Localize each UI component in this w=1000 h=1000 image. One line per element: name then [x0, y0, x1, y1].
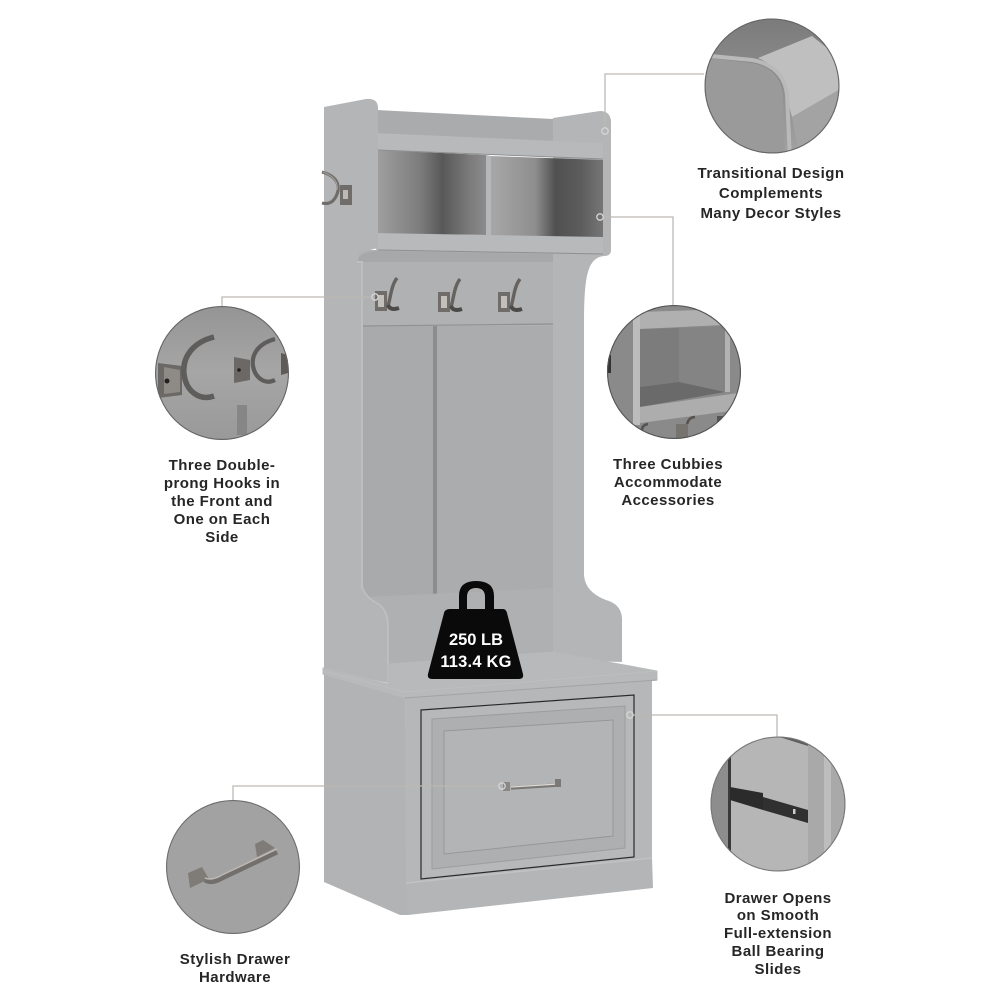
right cubby	[490, 156, 603, 238]
plinth	[406, 858, 653, 915]
detail circle: rounded corner	[704, 18, 840, 154]
drawer front	[421, 695, 634, 879]
caption: One on Each	[174, 511, 270, 528]
callout lines	[222, 74, 777, 800]
panel: transitional design detail	[698, 15, 845, 222]
detail circle: cubby	[605, 303, 743, 443]
caption: Slides	[755, 961, 801, 978]
top back board	[376, 110, 553, 146]
panel: hooks detail	[155, 306, 289, 542]
hall tree furniture illustration	[322, 99, 657, 915]
detail circle: hooks	[155, 306, 289, 440]
left cubby	[376, 150, 487, 235]
left upright panel	[324, 99, 388, 683]
back boards	[362, 326, 433, 600]
back panel upper rail	[355, 250, 553, 326]
caption: Full-extension	[724, 925, 832, 942]
front hook two	[438, 279, 462, 312]
panel: drawer hardware detail	[166, 800, 300, 982]
caption	[724, 890, 832, 978]
caption: Complements	[719, 185, 823, 202]
weight capacity badge	[428, 581, 523, 679]
front hook three	[498, 279, 522, 312]
weight label kilograms: 113.4 KG	[440, 653, 512, 671]
panel: cubbies detail	[605, 303, 743, 509]
detail circle: drawer pull	[166, 800, 300, 934]
caption: Three Cubbies	[613, 456, 723, 473]
caption	[613, 456, 723, 509]
bench seat	[323, 652, 657, 698]
caption: Hardware	[199, 969, 271, 986]
caption	[180, 951, 290, 986]
caption	[698, 165, 844, 222]
weight label pounds: 250 LB	[449, 631, 503, 649]
caption: Stylish Drawer	[180, 951, 290, 968]
caption: Many Decor Styles	[700, 205, 842, 222]
right upright panel	[553, 111, 622, 662]
caption: Side	[205, 529, 239, 546]
caption: Accessories	[621, 492, 715, 509]
panel: drawer slides detail	[708, 734, 848, 978]
drawer handle	[503, 779, 561, 791]
caption: prong Hooks in	[164, 475, 280, 492]
lower cabinet side	[324, 672, 408, 915]
bench back	[365, 588, 553, 672]
caption: the Front and	[171, 493, 273, 510]
caption: Accommodate	[614, 474, 722, 491]
caption: Three Double-	[169, 457, 275, 474]
lower cabinet front	[405, 680, 652, 885]
front hook one	[375, 278, 399, 311]
lower shelf	[376, 233, 603, 254]
top shelf	[376, 133, 603, 159]
caption: Ball Bearing	[732, 943, 824, 960]
caption: on Smooth	[737, 907, 819, 924]
caption	[164, 457, 280, 546]
caption: Transitional Design	[698, 165, 844, 182]
detail circle: ball bearing slide	[708, 734, 848, 874]
cubby divider	[486, 155, 491, 236]
side hook	[322, 172, 352, 205]
caption: Drawer Opens	[724, 890, 832, 907]
